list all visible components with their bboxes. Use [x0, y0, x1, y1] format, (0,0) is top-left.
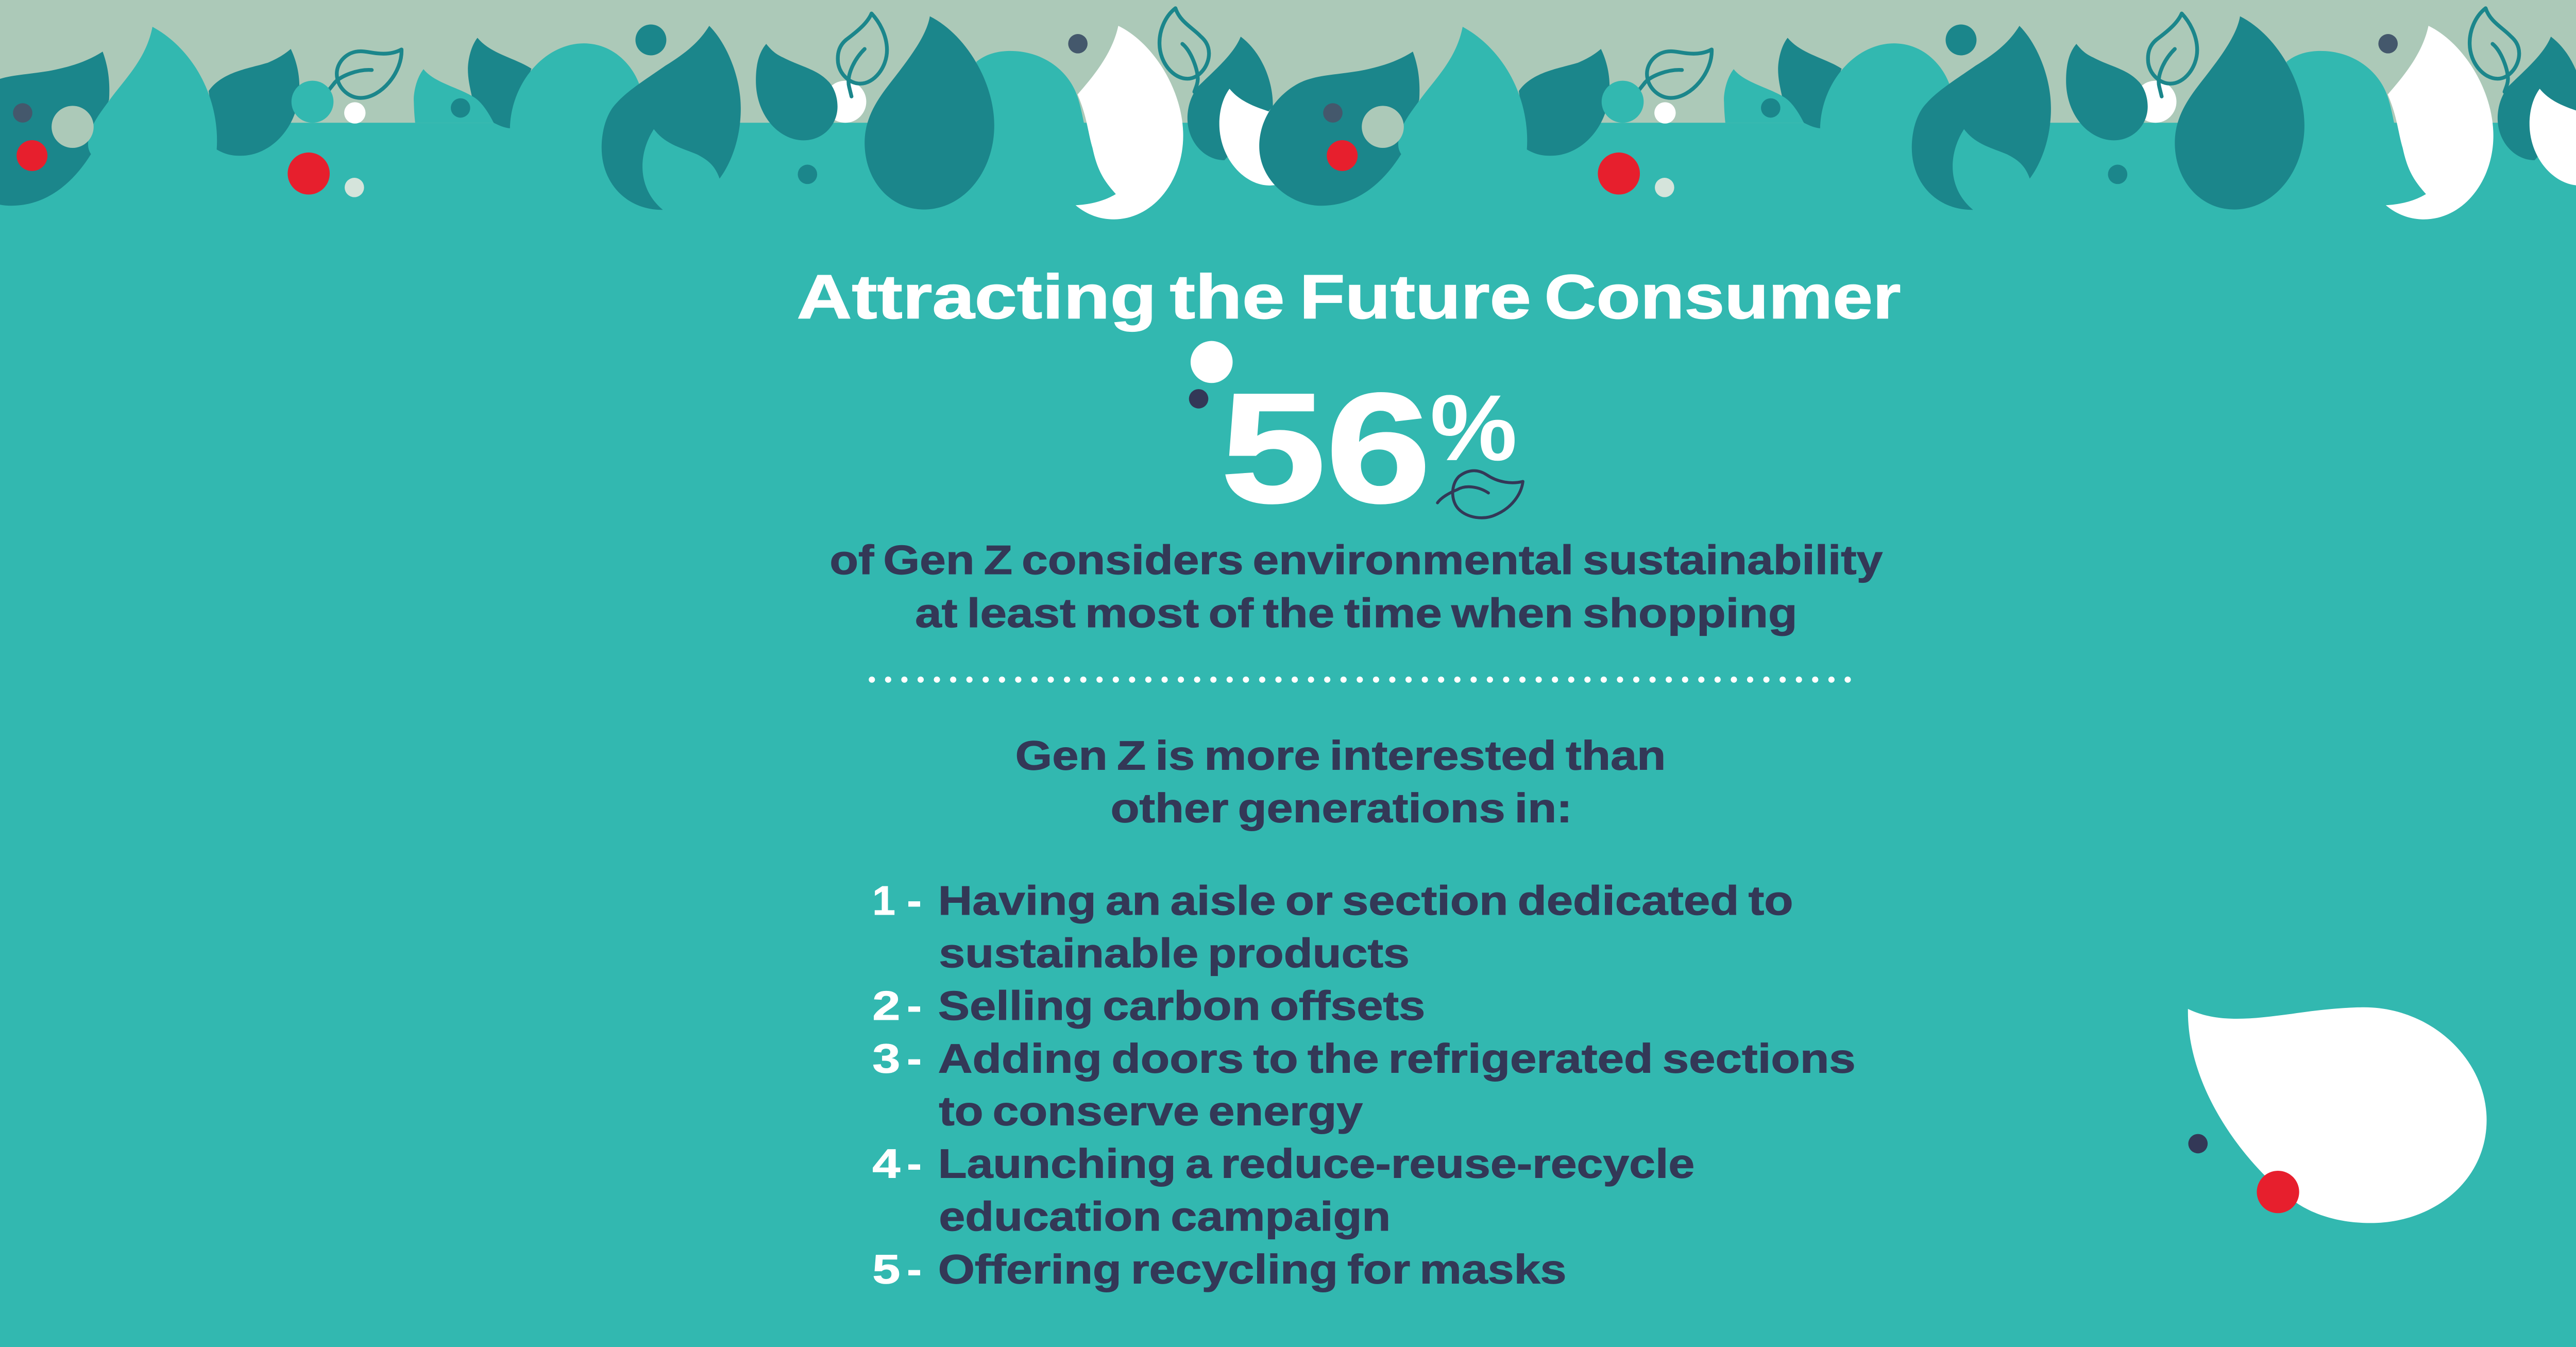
leaf: teal small	[414, 69, 494, 123]
item 2: Selling carbon offsets	[938, 984, 1425, 1030]
icon: outline leaf right	[1160, 8, 1209, 92]
text block: stat description	[829, 538, 1883, 637]
leaf: dark teal fifth	[1188, 37, 1273, 160]
dot: pale lower	[345, 178, 364, 197]
item 3: 3	[872, 1036, 900, 1082]
item 1: 1	[872, 879, 895, 924]
leaf: dark teal second	[1519, 49, 1609, 156]
list: Gen Z interests	[872, 879, 1856, 1293]
item 4: education campaign	[939, 1194, 1391, 1240]
title	[797, 264, 1901, 333]
heading: list intro: other generations in:	[1111, 786, 1572, 832]
item 4	[872, 1142, 1695, 1240]
item 3	[872, 1036, 1856, 1135]
leaf: dark teal fourth	[2066, 44, 2148, 140]
foliage garland: second repeat	[1259, 8, 2576, 220]
title: Consumer	[1544, 264, 1901, 333]
leaf: dark teal behind dome	[468, 38, 532, 128]
dot: navy grey	[13, 103, 32, 123]
item 2: -	[907, 984, 922, 1030]
drop: teal	[88, 27, 217, 206]
dot: navy grey top	[2378, 34, 2398, 54]
dot: white	[344, 102, 366, 124]
dot: navy bottom right	[2188, 1134, 2208, 1153]
dome: teal	[510, 43, 645, 164]
dome: teal	[1820, 43, 1955, 164]
dome: teal second	[2286, 51, 2414, 206]
item 4: -	[907, 1142, 922, 1188]
text block: stat description: at least most of the time when shopping	[915, 591, 1798, 637]
item 3: -	[907, 1036, 922, 1082]
item 5: -	[907, 1247, 922, 1293]
leaf: dark teal left	[0, 52, 109, 206]
item 1: sustainable products	[939, 931, 1410, 977]
dot: dark teal top	[1945, 25, 1976, 55]
icon: leaf outline by stat	[1437, 470, 1523, 518]
item 5: Offering recycling for masks	[938, 1247, 1566, 1293]
drop: big dark teal	[865, 16, 994, 210]
dot: pale green	[1362, 106, 1404, 148]
dot: navy above stat	[1189, 389, 1208, 409]
leaf: large white bottom right	[2188, 1007, 2487, 1223]
dot: pale lower	[1655, 178, 1674, 197]
dot: white behind leaf	[824, 81, 866, 123]
leaf: white inner	[1219, 89, 1290, 186]
leaf: dark teal with notch	[602, 26, 741, 210]
icon: outline leaf	[1639, 49, 1711, 98]
dot: teal	[1602, 81, 1643, 123]
dome: teal second	[976, 51, 1104, 206]
icon: outline leaf upright	[2148, 13, 2197, 96]
stat: 56: 56	[1221, 362, 1431, 536]
dot: pale green	[52, 106, 94, 148]
title: Future	[1299, 264, 1531, 333]
dot: teal	[292, 81, 333, 123]
leaf: dark teal with notch	[1912, 26, 2051, 210]
stat: percent sign: %	[1430, 376, 1517, 481]
text block: stat description: of Gen Z considers environmental sustainability	[829, 538, 1883, 584]
dot: white	[1654, 102, 1676, 124]
dot: dark teal small	[451, 98, 470, 117]
item 1	[872, 879, 1793, 977]
dot: white above stat	[1191, 341, 1233, 383]
dot: dark teal	[2108, 165, 2127, 184]
drop: big dark teal	[2175, 16, 2304, 210]
leaf: dark teal behind dome	[1778, 38, 1842, 128]
leaf: dark teal fifth	[2498, 37, 2576, 160]
dot: red lower	[287, 153, 330, 195]
item 2: 2	[872, 984, 900, 1030]
dot: dark teal small	[1761, 98, 1781, 117]
dot: dark teal	[798, 165, 817, 184]
leaf: white	[1076, 26, 1183, 220]
icon: outline leaf upright	[838, 13, 887, 96]
item 1: Having an aisle or section dedicated to	[938, 879, 1793, 924]
item 1: -	[907, 879, 922, 924]
dot: white behind leaf	[2134, 81, 2176, 123]
dot: red	[1327, 140, 1358, 171]
top band	[0, 0, 2576, 123]
icon: outline leaf	[329, 49, 401, 98]
item 3: to conserve energy	[939, 1089, 1363, 1135]
dot: dark teal top	[635, 25, 666, 55]
icon: outline leaf right	[2470, 8, 2519, 92]
dot: navy grey	[1323, 103, 1343, 123]
heading: list intro	[1015, 733, 1666, 832]
drop: teal	[1398, 27, 1527, 206]
leaf: white inner	[2530, 89, 2576, 186]
dot: red	[16, 140, 47, 171]
item 3: Adding doors to the refrigerated sections	[938, 1036, 1856, 1082]
leaf: white	[2386, 26, 2494, 220]
leaf: dark teal left	[1259, 52, 1419, 206]
heading: list intro: Gen Z is more interested than	[1015, 733, 1666, 780]
leaf: teal small	[1724, 69, 1804, 123]
item 4: 4	[872, 1142, 901, 1188]
title: the	[1170, 264, 1285, 333]
leaf: dark teal fourth	[756, 44, 838, 140]
dot: red bottom right	[2257, 1171, 2299, 1213]
item 5: 5	[872, 1247, 901, 1293]
item 4: Launching a reduce-reuse-recycle	[938, 1142, 1695, 1188]
leaf: dark teal second	[209, 49, 299, 156]
dot: navy grey top	[1068, 34, 1088, 54]
foliage garland: first repeat	[0, 8, 1290, 220]
dot: red lower	[1598, 153, 1640, 195]
title: Attracting	[797, 264, 1157, 333]
